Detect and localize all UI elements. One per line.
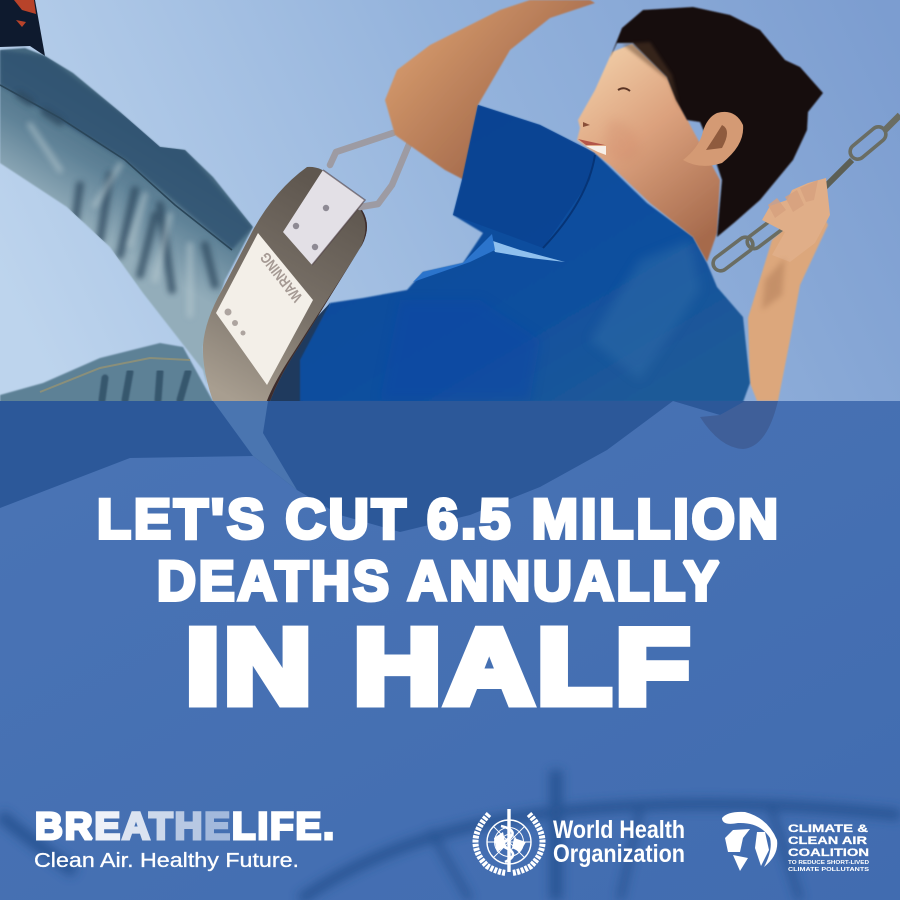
seat warning label: WARNING [257, 249, 306, 305]
hips behind seat [270, 303, 330, 401]
seat warning label [216, 233, 313, 385]
ghosted sleeve and arm [673, 401, 778, 449]
CCAC name: CLIMATE & [788, 823, 868, 835]
headline line 2: DEATHS ANNUALLY [157, 549, 722, 612]
boy's raised arm [385, 0, 595, 182]
swing seat [203, 133, 410, 405]
hair [610, 7, 823, 237]
headline line 3: IN HALF [186, 608, 694, 726]
metal bracket plate [283, 170, 365, 265]
logo: World Health Organization [475, 809, 685, 873]
WHO emblem [475, 809, 543, 873]
sky background [0, 0, 900, 401]
jeans: raised upper leg [0, 48, 253, 385]
headline [97, 487, 781, 726]
WHO name line 1: World Health [553, 816, 685, 844]
swing chain [710, 115, 900, 274]
CCAC name: COALITION [788, 847, 869, 859]
CCAC name: CLIMATE POLLUTANTS [788, 867, 869, 873]
CCAC name: TO REDUCE SHORT-LIVED [788, 860, 869, 866]
blue t-shirt [300, 105, 750, 402]
ear [683, 112, 743, 166]
face and neck skin [577, 44, 720, 262]
hand gripping chain [762, 178, 830, 310]
CCAC globe and swoosh [722, 812, 777, 871]
forearm [748, 200, 828, 401]
logo: BreatheLife [34, 806, 336, 872]
boy's head [577, 7, 823, 262]
tagline: Clean Air. Healthy Future. [34, 850, 299, 872]
shoe [0, 0, 45, 56]
blue text panel [0, 401, 900, 900]
CCAC name [788, 823, 869, 873]
CCAC name: CLEAN AIR [788, 835, 867, 847]
BreatheLife wordmark: BREATHELIFE. [35, 806, 336, 848]
ghosted body under panel [0, 401, 673, 532]
blurred playground frame in background [0, 770, 900, 900]
WHO name line 2: Organization [553, 840, 685, 868]
logo: Climate and Clean Air Coalition [722, 812, 869, 873]
photo: boy on a swing against blue sky [0, 0, 900, 405]
headline line 1: LET'S CUT 6.5 MILLION [97, 487, 781, 550]
jeans: lower leg [0, 343, 215, 405]
triangular metal handle [330, 133, 410, 207]
mouth and eye [578, 88, 630, 155]
ghosted seat [213, 401, 297, 490]
